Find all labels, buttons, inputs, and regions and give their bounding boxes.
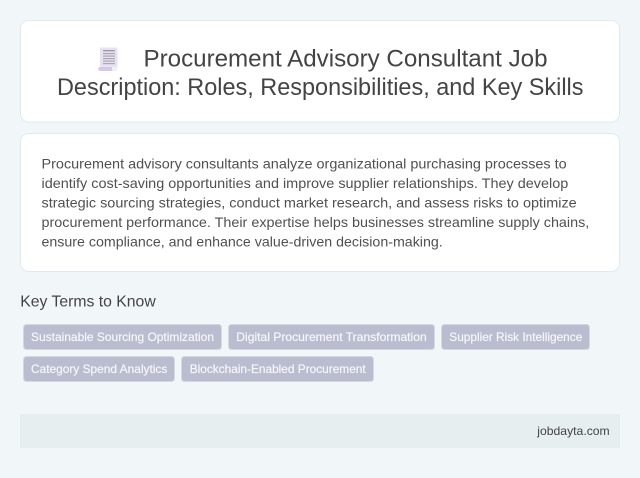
tag: supplier risk intelligence	[442, 324, 590, 350]
panel: title card	[20, 20, 620, 122]
text block: description: ensure compliance, and enhance value-driven decision-making.	[42, 233, 443, 249]
panel: description card	[20, 134, 620, 272]
footer	[20, 414, 620, 448]
tag: sustainable sourcing optimization	[24, 324, 222, 350]
tag: supplier risk intelligence: Supplier Risk Intelligence	[449, 330, 583, 344]
tag: category spend analytics	[24, 356, 174, 382]
tag: sustainable sourcing optimization: Sustainable Sourcing Optimization	[31, 330, 214, 344]
icon: document receipt	[98, 48, 118, 71]
text block: description	[42, 155, 589, 249]
tag: digital procurement transformation: Digital Procurement Transformation	[236, 330, 427, 344]
text block: description: procurement performance. Their expertise helps businesses streamline supply chains,	[42, 214, 589, 230]
text block: description: strategic sourcing strategies, conduct market research, and assess risks to optimize	[42, 194, 577, 210]
heading: title	[57, 46, 584, 101]
footer: jobdayta.com	[536, 424, 610, 438]
heading: title: Description: Roles, Responsibilities, and Key Skills	[57, 74, 584, 101]
heading: title: Procurement Advisory Consultant Job	[144, 46, 548, 72]
tag: blockchain-enabled procurement: Blockchain-Enabled Procurement	[190, 362, 366, 376]
tag: digital procurement transformation	[228, 324, 434, 350]
text block: description: identify cost-saving opportunities and improve supplier relationships. They develop	[42, 175, 569, 191]
tag: category spend analytics: Category Spend Analytics	[31, 362, 167, 376]
heading: key terms: Key Terms to Know	[20, 294, 156, 311]
text block: description: Procurement advisory consultants analyze organizational purchasing processes to	[42, 155, 567, 171]
tag: blockchain-enabled procurement	[182, 356, 374, 382]
